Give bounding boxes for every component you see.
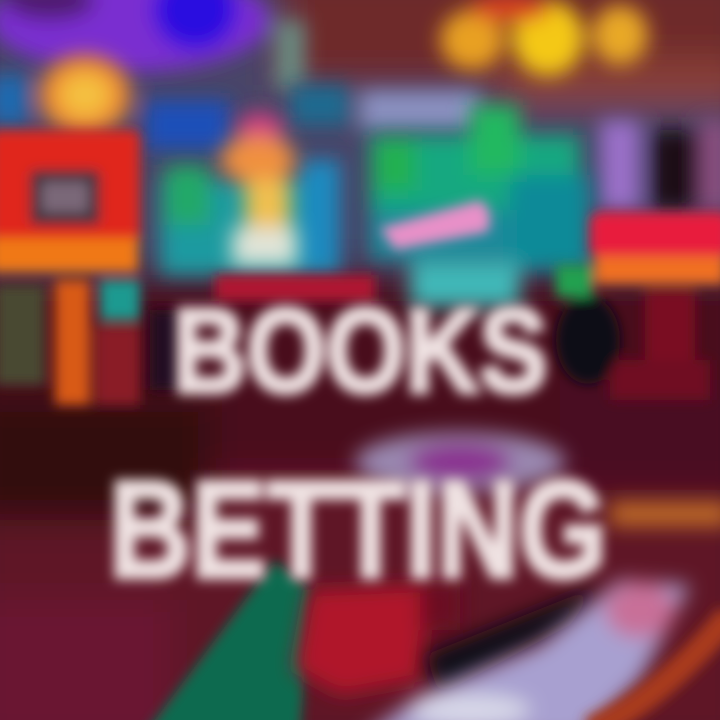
red machine right <box>556 212 720 400</box>
slot machine left <box>0 130 140 405</box>
roulette table <box>355 432 720 526</box>
dark band <box>425 585 600 695</box>
green felt <box>140 560 310 720</box>
orange curved rail <box>590 615 720 720</box>
red band above the first word <box>150 275 375 390</box>
ceiling lights: yellow cluster <box>440 0 648 76</box>
pink sign <box>380 200 490 250</box>
upper band colours <box>0 55 720 210</box>
central rainbow machine <box>160 160 340 275</box>
title <box>109 284 607 607</box>
central rainbow tower <box>220 112 297 266</box>
title word 2: BETTING <box>109 453 607 607</box>
green and teal machine <box>370 105 590 307</box>
red chips stack <box>295 580 460 695</box>
title word 1: BOOKS <box>172 284 548 418</box>
ceiling lights: purple arc <box>0 0 305 90</box>
lilac table <box>360 580 690 720</box>
